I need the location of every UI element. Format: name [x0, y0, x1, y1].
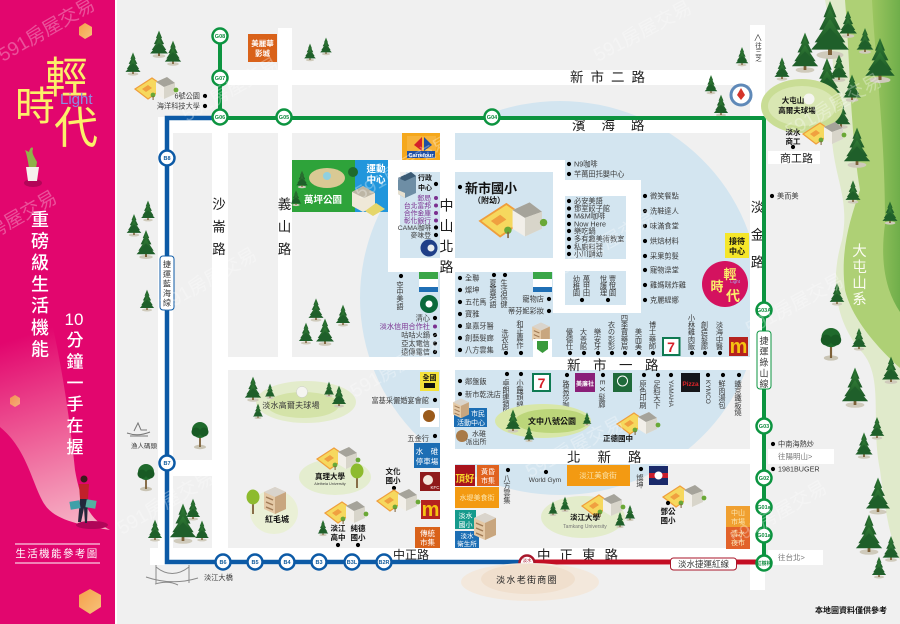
road network [150, 25, 834, 590]
blue line [167, 118, 527, 562]
shopper figure [69, 476, 108, 529]
parking sign: 水 碓 [416, 446, 439, 456]
blue station labels: B8 [163, 156, 171, 162]
block: 空中美語 and Starbucks: 清心 [416, 314, 430, 322]
green station labels: 紅樹林 [756, 560, 772, 567]
watermarks: 591房屋交易 [178, 53, 283, 126]
food street sign [567, 465, 630, 486]
project logo badge: 代 [726, 288, 740, 304]
heading: 10分鐘一手在握: 10 [65, 310, 83, 329]
schools: 淡江高中 and 純德國小: 純德 [350, 523, 366, 533]
green station labels: G05 [279, 115, 289, 121]
block: 鄰盤飯 labels and community centre: 卓朗連鎖所 [502, 378, 511, 416]
reception sign [725, 233, 749, 258]
landmark: 淡水老街商圈: 淡水老街商圈 [496, 574, 558, 585]
red terminal station: 淡水 [522, 557, 532, 563]
road labels: 義山路 [276, 196, 291, 264]
landmark: 淡水老街商圈 [461, 563, 599, 601]
block: 鄰盤飯 labels and community centre: 新市乾洗店 [465, 390, 501, 399]
campus: 真理大學 [299, 447, 371, 495]
block: 全國 logo, 富基, 五金行: 五金行 [407, 434, 429, 443]
storefront row below 新市一路: 足料天下 [653, 380, 662, 410]
blue line tag [160, 256, 174, 310]
service area circle [360, 101, 760, 495]
hexagon bottom [79, 589, 101, 614]
green stations [212, 28, 772, 570]
N9 block labels: 芊萬田托嬰中心 [574, 170, 624, 178]
administrative centre list: 麥味登 [411, 230, 431, 240]
golf course: 大屯山高爾夫球場: 大屯山 [782, 95, 804, 105]
labels: 八方雲集, World Gym: 八方雲集 [503, 475, 512, 505]
block labels: 幼稚園 / 豐悅護理: 幼稚園 [572, 274, 582, 298]
administrative centre list: 中心 [418, 183, 432, 192]
schools: 淡江高中 and 純德國小: 高中 [330, 532, 346, 542]
market sign [415, 527, 440, 548]
road labels: 中山北路 [438, 198, 454, 280]
block: 空中美語 and Starbucks: 淡水信用合作社 [380, 322, 430, 331]
Carrefour sign: Carrefour [408, 153, 434, 159]
block list: 必安美語: M&M咖啡 [574, 212, 605, 220]
road labels: 新市二路 [570, 69, 652, 85]
red line tag [670, 558, 736, 570]
market signs [726, 506, 750, 549]
block labels: 幼稚園 / 豐悅護理 [572, 274, 618, 302]
market signs: 夜市 [731, 538, 745, 547]
round trees [138, 328, 841, 491]
KFC sign: KFC [430, 485, 440, 490]
school: 新市國小 [458, 181, 547, 238]
block labels: 幼稚園 / 豐悅護理: 豐悅園 [608, 274, 618, 298]
block list: 必安美語: 多有趣美術教室 [574, 234, 624, 244]
pine trees [125, 1, 900, 578]
school: 鄧公國小: 鄧公 [660, 507, 676, 516]
road labels: 北新路 [567, 450, 658, 465]
block: 全聯 list: 創藝髮廊 [465, 334, 494, 342]
project logo badge: 輕 [723, 267, 737, 282]
hexagon top [79, 23, 92, 39]
left brand panel [0, 0, 117, 624]
torch emblem [731, 85, 751, 105]
green station labels: G03A [757, 308, 771, 314]
school: 文化國小 [377, 466, 420, 512]
project logo badge: 時 [710, 279, 724, 294]
road labels: 中正路 [393, 547, 429, 562]
small hexagon [10, 395, 20, 407]
green station labels [215, 34, 772, 567]
list: 微笑餐點 column: 洗鞋達人 [650, 206, 679, 216]
golf course: 大屯山高爾夫球場: 高爾夫球場 [778, 105, 816, 115]
administrative centre list: CAMA咖啡 [398, 223, 431, 232]
park: 萬坪公園 and sports centre: 中心 [366, 174, 386, 186]
green station labels: G06 [215, 115, 225, 121]
heading: 10分鐘一手在握: 分鐘一手在握 [64, 331, 83, 459]
campus: 真理大學: Aletheia University [314, 482, 346, 486]
panel caption: 生活機能參考圖 [15, 547, 99, 560]
top left campus: 6號公園 / 海洋科技大學: 6號公園 [174, 92, 200, 100]
icon: Danjiang bridge [146, 565, 233, 585]
panel caption [15, 544, 100, 564]
signs: 頂好, 黃昏市集, 美食街, 國小, 衛生所: 國小 [458, 520, 472, 529]
watermarks: 591房屋交易 [156, 243, 261, 316]
school: 正德國中 [603, 412, 660, 443]
watermarks: 591房屋交易 [554, 206, 659, 279]
park: 萬坪公園 and sports centre: 運動 [366, 163, 386, 175]
school: 新市國小: （附幼） [473, 195, 505, 205]
logo: Light [60, 91, 93, 108]
logo: 輕 [45, 55, 88, 103]
block: 全聯 list [458, 272, 552, 357]
blue station labels: B7 [163, 461, 171, 467]
block: 全聯 list: 生活保健 [500, 278, 509, 309]
green station labels: G01a [757, 533, 772, 539]
top left campus: 6號公園 / 海洋科技大學 [135, 77, 207, 110]
block: 全國 logo, 富基, 五金行: 富基采儷婚宴會館 [371, 396, 429, 405]
block: 鄰盤飯 labels and community centre: 小饅頭綿幼 [516, 378, 525, 416]
watermarks: 591房屋交易 [726, 476, 831, 549]
block list: 必安美語 [567, 196, 624, 258]
block: 鄰盤飯 labels and community centre: 市民 [471, 409, 485, 418]
list: 微笑餐點 column: 微笑餐點 [650, 192, 679, 200]
block: 全國 logo, 富基, 五金行 [371, 372, 439, 443]
list: 微笑餐點 column: 烘焙材料 [650, 236, 679, 246]
right side labels: 1981BUGER [778, 464, 820, 474]
storefront row below 新市一路 [562, 373, 743, 417]
block: 全聯 list: 蒂芬妮彩妝 [508, 306, 544, 316]
school: 鄧公國小 [660, 485, 706, 525]
N9 block labels [567, 160, 624, 178]
administrative centre list: 合作金庫 [404, 208, 431, 218]
project logo badge: Light [730, 279, 741, 284]
block labels: 幼稚園 / 豐悅護理: 悅護理 [600, 274, 608, 297]
list: 微笑餐點 column [643, 192, 686, 304]
landmark: 紅毛城: 紅毛城 [265, 514, 289, 524]
N9 block labels: N9咖啡 [574, 160, 598, 168]
block: 全聯 list: 皇嘉牙醫 [465, 322, 494, 330]
blue line tag: 捷運藍海線 [162, 259, 171, 308]
7-Eleven logo [532, 373, 551, 392]
storefront row above 新市一路: 美而美 [634, 328, 644, 351]
list: 微笑餐點 column: 雞媽咪炸雞 [650, 280, 686, 290]
storefront row below 新市一路: 美廉社 [576, 380, 594, 388]
schools: 淡江高中 and 純德國小 [318, 501, 368, 547]
green station labels: G01a [757, 505, 772, 511]
cinema sign: 美麗華 [251, 38, 274, 48]
block list: 必安美語: 小川調幼 [574, 250, 603, 258]
market signs: 清水 [731, 529, 745, 538]
blue station labels: B2R [378, 560, 390, 566]
blue stations [160, 150, 392, 570]
blue station labels [163, 156, 390, 566]
green station labels: G03 [759, 424, 769, 430]
logo: 代 [54, 104, 98, 153]
road labels: 淡金路 [748, 200, 764, 282]
storefront row above 新市一路: 創造髮廊 [700, 321, 710, 351]
blue station labels: B4 [283, 560, 291, 566]
storefront row above 新市一路: 優德仕 [566, 328, 574, 351]
icon: fishing pier [127, 423, 158, 450]
blue station labels: B5 [251, 560, 259, 566]
school: 鄧公國小: 國小 [660, 515, 676, 525]
cactus pot icon [24, 147, 42, 187]
mountain label: 大屯山系 [850, 243, 866, 307]
road labels: 往三芝 [754, 41, 762, 63]
school: 正德國中: 正德國中 [603, 433, 633, 443]
storefront row above 新市一路: 博士藥師 [648, 321, 658, 351]
storefront row above 新市一路: 大善館 [580, 328, 588, 351]
storefront row below 新市一路: 鮮肉湯包 [718, 379, 727, 409]
school: 新市國小: 新市國小 [465, 181, 517, 196]
block: 全聯 list: 八方雲集 [465, 346, 494, 354]
block: 全聯 list: 洗衣店 [501, 328, 510, 352]
administrative centre list: 郵局 [417, 194, 431, 202]
road labels: 中正東路 [537, 548, 627, 563]
park: 文中八號公園 [495, 404, 591, 442]
燦坤 label and bank logo [636, 466, 668, 490]
block: 鄰盤飯 labels and community centre [453, 372, 525, 446]
green station labels: G08 [215, 34, 225, 40]
cinema sign: 影城 [255, 48, 270, 58]
administrative centre list: 台北富邦 [404, 201, 431, 210]
Carrefour sign [402, 133, 440, 160]
storefront row below 新市一路: 原色印刷 [639, 380, 648, 410]
list: 微笑餐點 column: 寵物澡堂 [650, 266, 679, 274]
road labels: 濱海路 [572, 118, 660, 133]
green station labels: G07 [215, 76, 225, 82]
cinema sign [248, 34, 277, 62]
storefront row below 新市一路: 路易莎咖啡 [562, 379, 571, 417]
parking sign: 停車場 [416, 456, 439, 466]
campus: 淡江大學 [541, 494, 635, 538]
block: 全聯 list: 全聯 [465, 274, 479, 282]
icon: Danjiang bridge: 淡江大橋 [204, 573, 233, 582]
red line [527, 560, 760, 564]
signs: 頂好, 黃昏市集, 美食街, 國小, 衛生所: 衛生所 [457, 539, 477, 548]
block: 空中美語 and Starbucks: 遠傳電信 [401, 348, 430, 356]
watermarks: 591房屋交易 [114, 466, 218, 539]
road labels: 新市一路 [567, 357, 671, 373]
school: 淡水商工 [786, 122, 846, 149]
block: 空中美語 and Starbucks: 空中美語 [396, 280, 405, 311]
park: 萬坪公園 and sports centre: 萬坪公園 [304, 194, 342, 206]
icon: fishing pier: 漁人碼頭 [131, 441, 158, 450]
list: 微笑餐點 column: 味滿食堂 [650, 222, 679, 230]
list: 微笑餐點 column: 克麗緹娜 [650, 296, 679, 304]
storefront row below 新市一路: YAMAHA [667, 380, 674, 408]
McDonald's logo [729, 336, 748, 358]
watermarks: 591房屋交易 [522, 412, 627, 482]
school: 淡水商工: 商工 [786, 136, 801, 146]
labels: 八方雲集, World Gym: World Gym [529, 477, 561, 484]
watermarks: 591房屋交易 [352, 131, 456, 204]
block: 全聯 list: 燦坤 [465, 286, 479, 294]
storefront row below 新市一路: E X 髮廊 [598, 380, 607, 409]
storefront row below 新市一路: Pizza [682, 381, 699, 388]
right side labels: 美而美 [777, 192, 799, 200]
blue station labels: B6 [219, 560, 227, 566]
green station labels: G04 [487, 115, 498, 121]
blue station labels: B3 [315, 560, 323, 566]
block labels: 幼稚園 / 豐悅護理: 萬甲田 [582, 274, 592, 298]
燦坤 label and bank logo: 燦坤 [636, 474, 645, 490]
signs: 頂好, 黃昏市集, 美食街, 國小, 衛生所: 淡水 [460, 531, 474, 540]
signs: 頂好, 黃昏市集, 美食街, 國小, 衛生所: 黃昏 [481, 467, 495, 476]
block: 全聯 list: 和正農作 [516, 319, 525, 350]
signs: 頂好, 黃昏市集, 美食街, 國小, 衛生所: 淡水 [458, 511, 472, 520]
schools: 淡江高中 and 純德國小: 國小 [350, 532, 366, 542]
campus: 真理大學: 真理大學 [315, 471, 345, 481]
block: 空中美語 and Starbucks: 亞太電信 [401, 339, 430, 348]
market sign: 傳統 [420, 528, 435, 538]
block list: 必安美語: Now Here [574, 220, 606, 228]
road labels: 往陽明山> [778, 451, 813, 461]
block: 鄰盤飯 labels and community centre: 鄰盤飯 [465, 377, 487, 386]
right side labels: 中南海熱炒 [778, 440, 814, 448]
block: 空中美語 and Starbucks [380, 272, 438, 356]
food street sign: 淡江美食街 [579, 470, 617, 480]
campus: 淡江大學: 淡江大學 [570, 512, 600, 522]
watermarks: 591房屋交易 [742, 269, 847, 339]
list: 微笑餐點 column: 采果剪髮 [650, 252, 679, 260]
block list: 必安美語: 樂吃鍋 [574, 226, 596, 236]
signs: 頂好, 黃昏市集, 美食街, 國小, 衛生所: 頂好 [455, 473, 475, 485]
golf course: 淡水高爾夫球場: 淡水高爾夫球場 [262, 400, 320, 410]
signs: 頂好, 黃昏市集, 美食街, 國小, 衛生所: 水堤美食街 [460, 493, 494, 502]
watermarks: 591房屋交易 [782, 69, 886, 142]
block list: 必安美語: 鄧室餃子館 [574, 204, 610, 213]
administrative centre list: 行政 [418, 173, 432, 182]
road labels: 商工路 [780, 151, 813, 165]
storefront row above 新市一路: 淡海中醫 [716, 321, 724, 351]
logo [15, 55, 98, 153]
blue station labels: B3L [347, 560, 358, 566]
administrative centre list: 彰化銀行 [404, 216, 431, 225]
market signs: 市場 [731, 517, 745, 526]
footnote: 本地圖資料僅供參考 [815, 605, 887, 615]
McDonald's sign [421, 499, 440, 521]
block: 全國 logo, 富基, 五金行: 全國 [422, 374, 436, 382]
project logo badge [702, 261, 748, 307]
green station labels: G02 [759, 476, 769, 482]
park: 萬坪公園 and sports centre [291, 160, 388, 216]
mountain range [825, 0, 900, 560]
storefront row above 新市一路: 樂安牙 [594, 328, 602, 350]
block: 全聯 list: 寵物店 [522, 294, 544, 304]
block: 鄰盤飯 labels and community centre: 派出所 [466, 437, 486, 446]
green line tag [757, 331, 771, 390]
7-Eleven logo: 7 [538, 375, 546, 391]
logo: 時 [15, 85, 55, 129]
landmark: 紅毛城 [246, 487, 298, 534]
signs: 頂好, 黃昏市集, 美食街, 國小, 衛生所 [455, 465, 499, 548]
block: 鄰盤飯 labels and community centre: 水碓 [472, 429, 486, 438]
parking sign [414, 443, 440, 468]
storefront row above 新市一路: 四季寶藥局 [620, 314, 630, 351]
block list: 必安美語: 私廚料理 [574, 242, 603, 252]
campus: 淡江大學: Tamkang University [563, 524, 607, 530]
green line [220, 36, 764, 563]
watermarks: 591房屋交易 [346, 329, 451, 402]
school: 文化國小: 文化 [386, 466, 401, 476]
red line tag: 淡水捷運紅線 [678, 559, 729, 569]
block: 全聯 list: 寶雅 [465, 310, 479, 318]
administrative centre list [398, 172, 438, 256]
top left campus: 6號公園 / 海洋科技大學: 海洋科技大學 [157, 102, 200, 110]
market signs: 中山 [731, 508, 745, 517]
storefront row below 新市一路: KYMCO [704, 380, 711, 404]
block: 全聯 list: 夏蕙英語 [489, 279, 498, 309]
school: 淡水商工: 淡水 [786, 127, 801, 137]
heading: 重磅級生活機能: 重磅級生活機能 [29, 210, 49, 361]
golf course: 淡水高爾夫球場 [245, 377, 356, 423]
storefront row above 新市一路: 衣の彭彭 [608, 321, 616, 351]
storefront row below 新市一路: 鐵京鐵板燒 [734, 379, 743, 417]
road labels [210, 33, 813, 563]
transit lines [160, 28, 772, 570]
red terminal station [520, 556, 534, 570]
right side labels [770, 192, 820, 474]
storefront row above 新市一路 [566, 313, 724, 355]
storefront row above 新市一路: 小林雞肉飯 [688, 313, 696, 351]
road labels: 往台北> [778, 552, 805, 562]
block list: 必安美語: 必安美語 [574, 196, 603, 206]
golf course: 大屯山高爾夫球場 [761, 79, 843, 133]
KFC sign [420, 472, 440, 491]
block: 全聯 list: 五花馬 [465, 298, 487, 306]
park: 文中八號公園: 文中八號公園 [528, 416, 576, 426]
road labels: ∧ [753, 33, 763, 43]
school: 文化國小: 國小 [386, 475, 401, 485]
reception sign: 中心 [729, 246, 745, 256]
signs: 頂好, 黃昏市集, 美食街, 國小, 衛生所: 市集 [481, 476, 495, 485]
schools: 淡江高中 and 純德國小: 淡江 [330, 523, 346, 533]
7-Eleven logo [662, 337, 680, 356]
market sign: 市集 [420, 537, 435, 547]
reception sign: 接待 [729, 236, 745, 246]
labels: 八方雲集, World Gym [503, 468, 561, 505]
7-Eleven logo: 7 [667, 339, 675, 355]
road labels: 沙崙路 [210, 197, 226, 264]
block: 空中美語 and Starbucks: 咕咕火鍋 [401, 330, 430, 340]
block: 鄰盤飯 labels and community centre: 活動中心 [457, 418, 485, 427]
green line tag: 捷運綠山線 [758, 335, 768, 390]
decorative wave [0, 295, 110, 530]
